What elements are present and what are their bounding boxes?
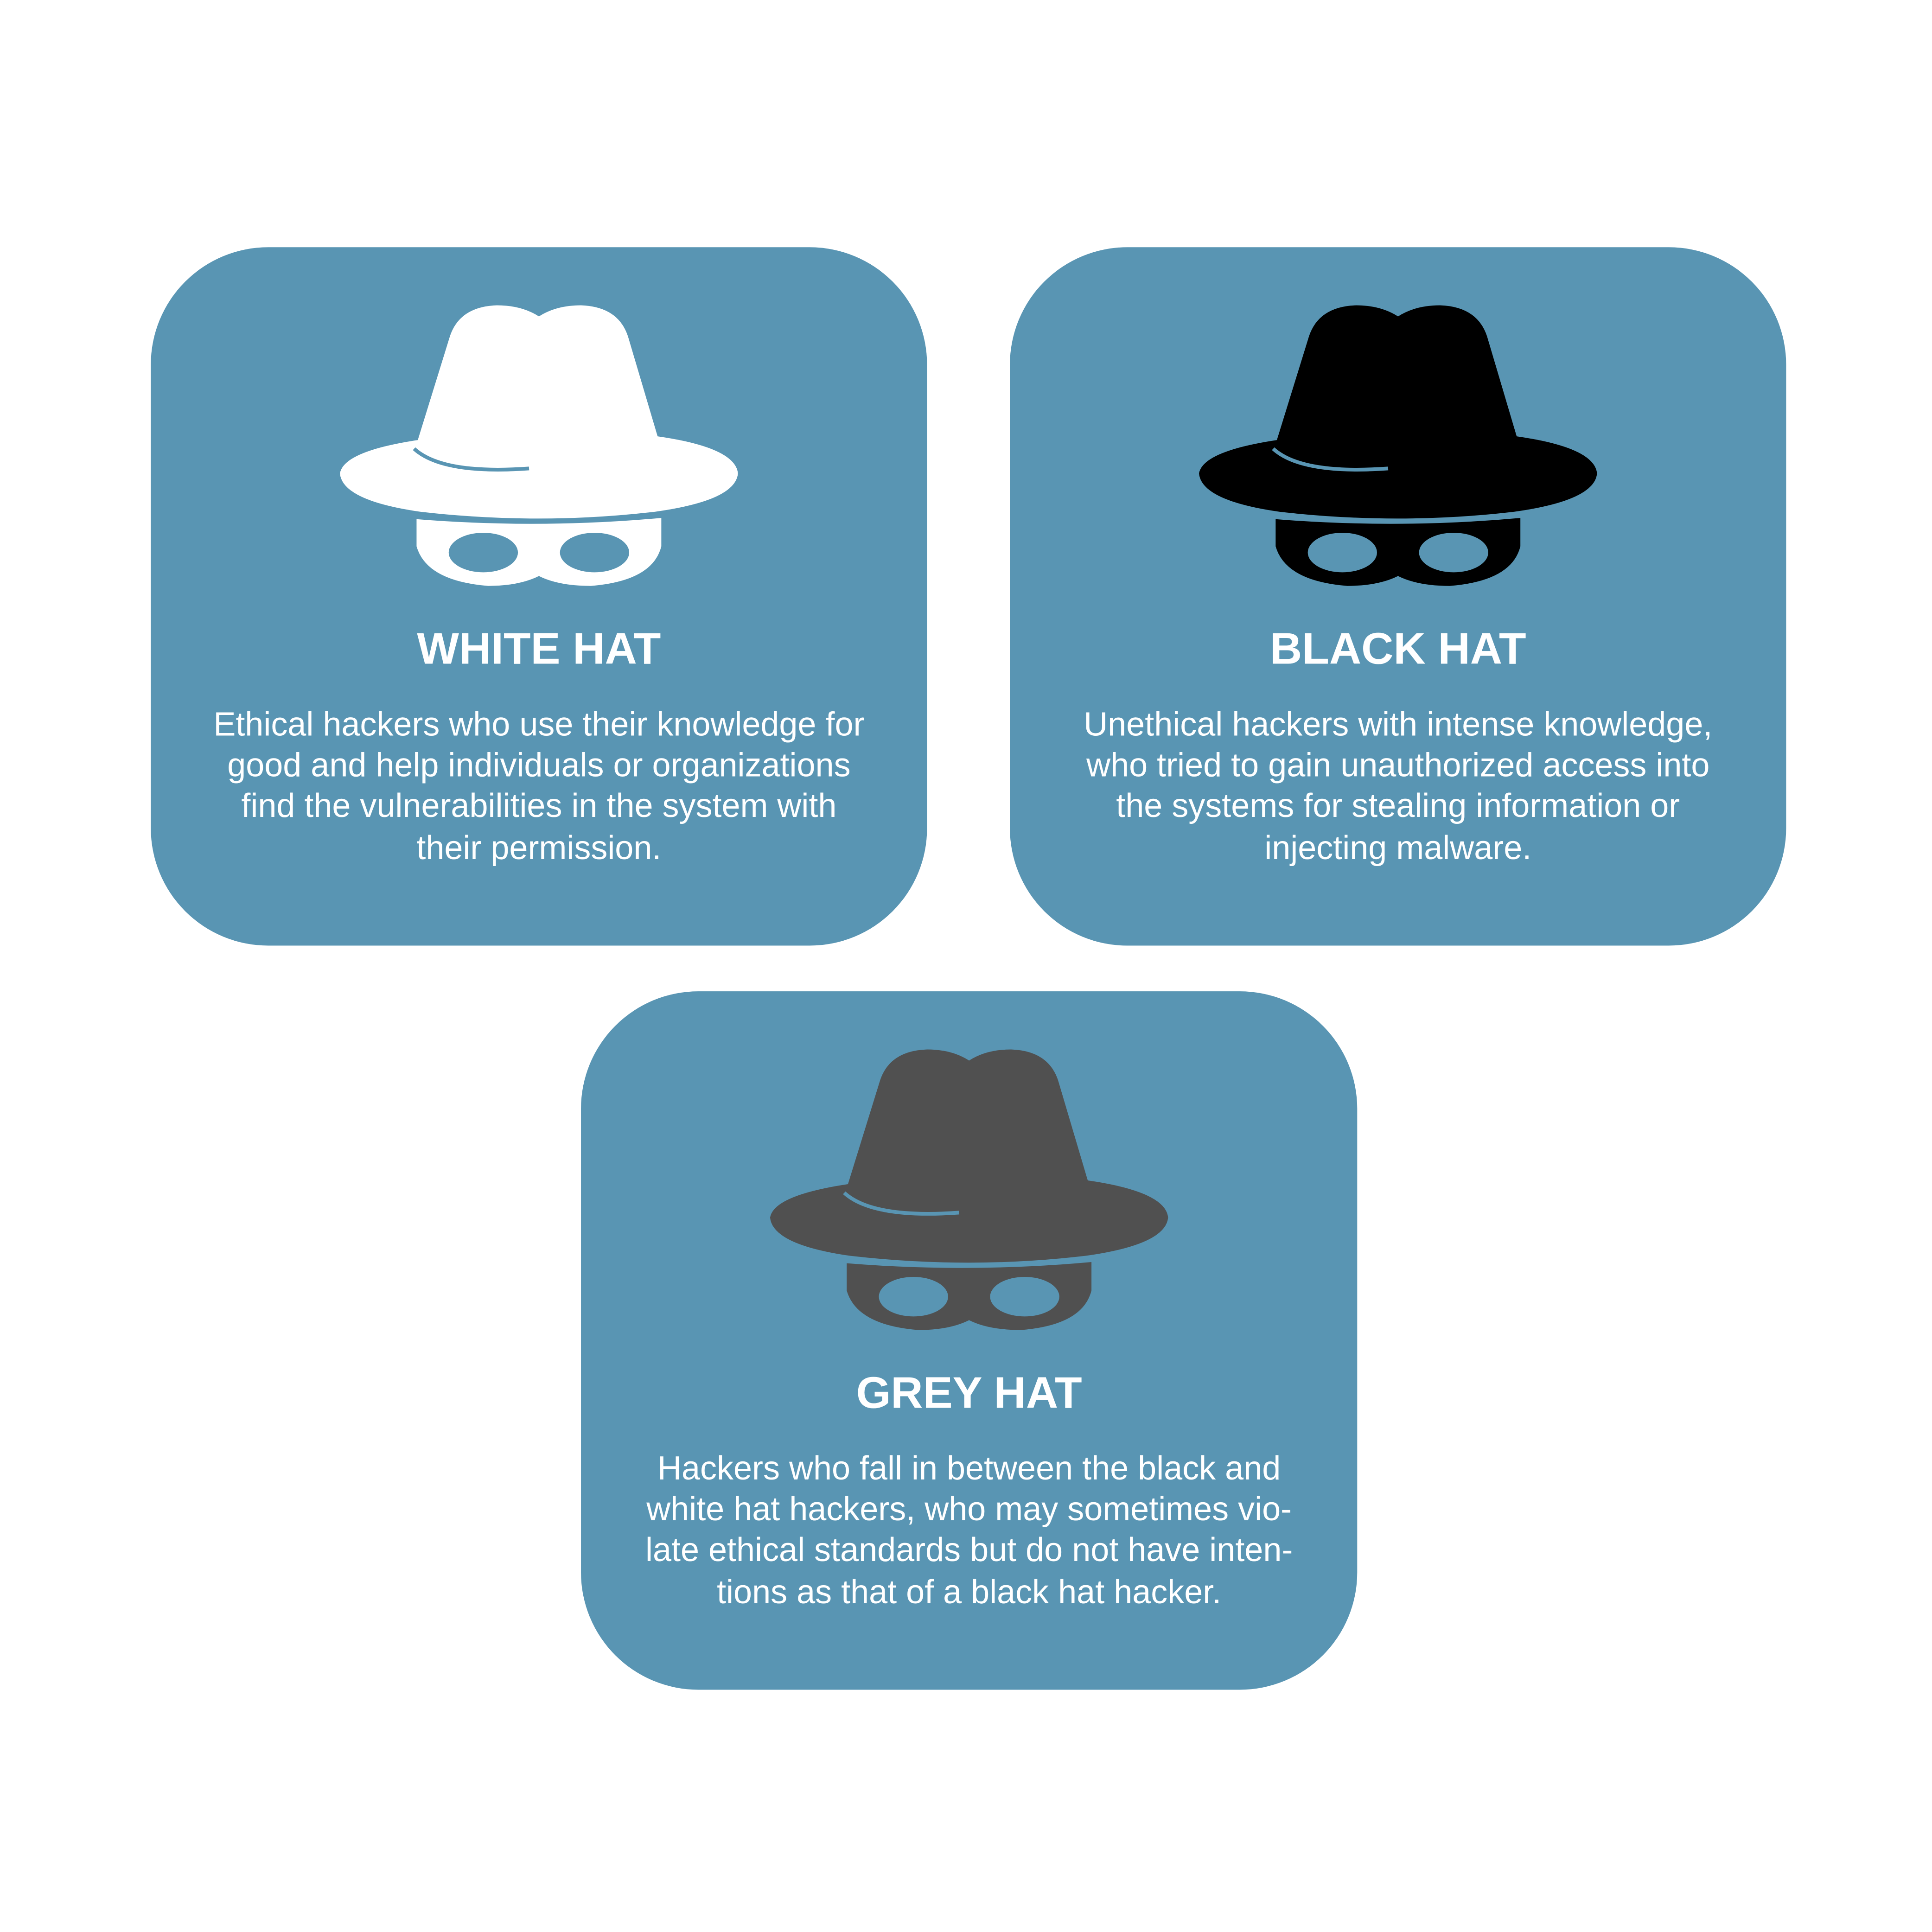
text: grey hat description [645,1450,1293,1611]
icon: black hat [1199,306,1597,586]
heading: white hat: WHITE HAT [417,624,661,674]
text: grey hat description: tions as that of a black hat hacker. [717,1574,1221,1611]
text: grey hat description: white hat hackers, who may sometimes vio- [646,1491,1292,1528]
heading: black hat: BLACK HAT [1270,624,1526,674]
heading: grey hat: GREY HAT [856,1368,1082,1418]
text: black hat description: who tried to gain unauthorized access into [1086,746,1709,784]
text: white hat description: find the vulnerabilities in the system with [241,787,836,824]
text: black hat description: injecting malware. [1264,829,1531,867]
text: grey hat description: Hackers who fall in between the black and [657,1450,1281,1487]
text: grey hat description: late ethical standards but do not have inten- [645,1531,1293,1569]
text: white hat description: Ethical hackers who use their knowledge for [213,706,864,743]
text: black hat description [1084,706,1712,867]
text: white hat description [213,706,864,867]
text: black hat description: Unethical hackers with intense knowledge, [1084,706,1712,743]
icon: grey hat [770,1049,1168,1330]
panel: grey hat [581,991,1357,1690]
panel: black hat [1010,247,1786,946]
text: white hat description: good and help individuals or organizations [227,746,851,784]
text: white hat description: their permission. [416,829,661,867]
panel: white hat [151,247,927,946]
icon: white hat [340,306,738,586]
text: black hat description: the systems for stealing information or [1116,787,1680,824]
